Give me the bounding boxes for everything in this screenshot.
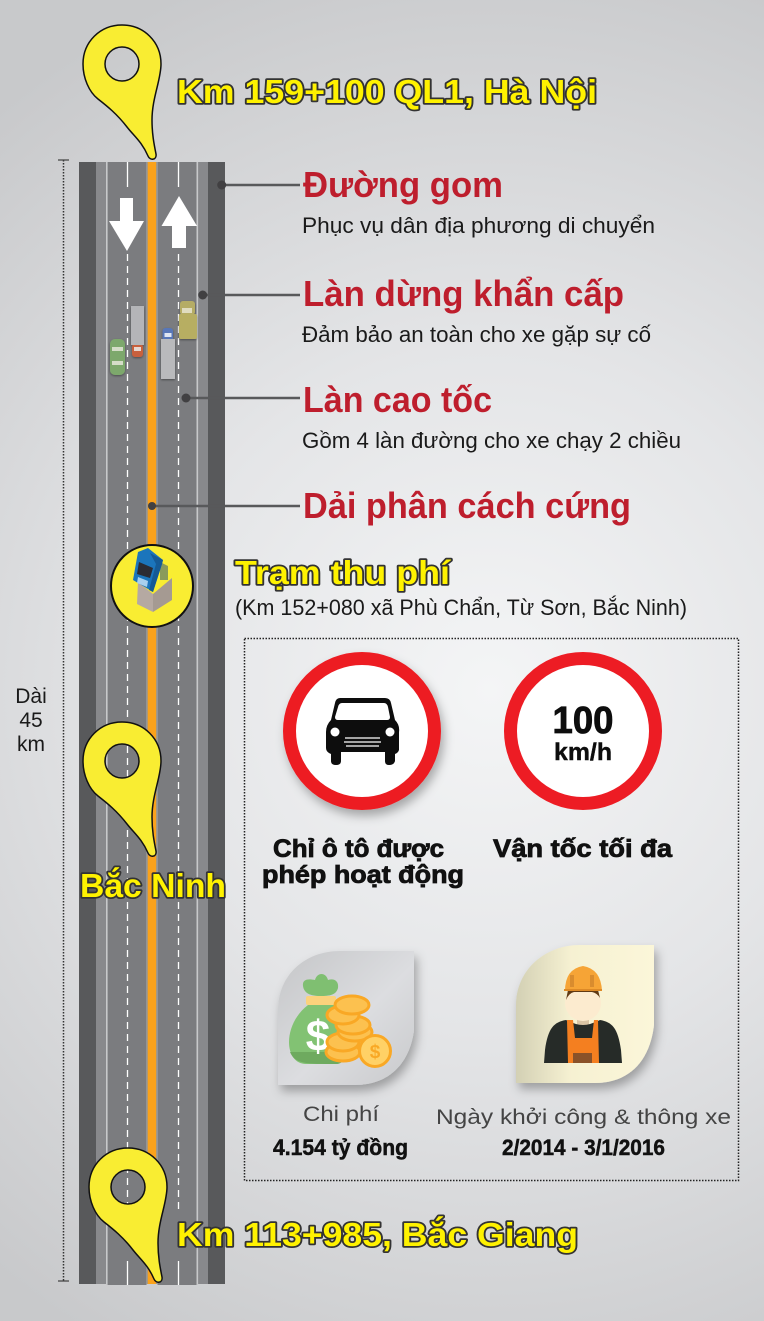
icon: construction worker (516, 945, 654, 1083)
fact: construction dates (436, 1106, 731, 1160)
callout: median (148, 485, 631, 526)
fact: construction dates: 2/2014 - 3/1/2016 (502, 1135, 665, 1160)
label: cars only (262, 835, 464, 889)
sign: cars only (290, 658, 434, 804)
sign: speed limit (510, 658, 656, 804)
length dimension line (58, 160, 69, 1281)
icon: toll booth (111, 545, 193, 627)
label: cars only: phép hoạt động (262, 861, 464, 889)
label: speed limit: Vận tốc tối đa (493, 835, 673, 863)
callout: expressway lanes (182, 379, 681, 453)
panel: regulations and facts (244, 638, 738, 1180)
label: cars only: Chỉ ô tô được (273, 835, 444, 863)
icon: money bag and coins: $ (370, 1042, 381, 1063)
fact: cost (273, 1103, 408, 1160)
icon: money bag and coins: $ (306, 1012, 330, 1061)
callout: emergency lane: Đảm bảo an toàn cho xe gặp sự cố (302, 322, 651, 347)
icon: money bag and coins (278, 951, 414, 1085)
callout: emergency lane (198, 273, 651, 347)
vehicles (110, 301, 197, 379)
icon: direction arrow down (109, 198, 144, 251)
toll station label: (Km 152+080 xã Phù Chẩn, Từ Sơn, Bắc Ninh) (235, 595, 687, 620)
label: end location: Km 113+985, Bắc Giang (177, 1216, 578, 1253)
callout: service road: Đường gom (303, 164, 503, 205)
pin: Bắc Ninh (83, 722, 161, 856)
icon: direction arrow up (162, 196, 197, 248)
callout: expressway lanes: Gồm 4 làn đường cho xe chạy 2 chiều (302, 428, 681, 453)
length label: 45 (19, 709, 43, 732)
fact: cost: Chi phí (303, 1103, 379, 1126)
fact: cost: 4.154 tỷ đồng (273, 1135, 408, 1160)
callout: emergency lane: Làn dừng khẩn cấp (303, 273, 624, 314)
sign: speed limit: 100 (552, 700, 614, 742)
fact: construction dates: Ngày khởi công & thông xe (436, 1106, 731, 1129)
callout: expressway lanes: Làn cao tốc (303, 379, 492, 420)
label: Bắc Ninh: Bắc Ninh (80, 867, 226, 904)
length label: km (17, 733, 45, 756)
callout: service road: Phục vụ dân địa phương di chuyển (302, 213, 655, 238)
pin: bottom (89, 1148, 167, 1282)
toll station label: Trạm thu phí (235, 554, 452, 591)
road (79, 162, 225, 1285)
label: start location: Km 159+100 QL1, Hà Nội (177, 73, 597, 110)
sign: speed limit: km/h (554, 739, 612, 766)
pin: top (83, 25, 161, 159)
callout: median: Dải phân cách cứng (303, 485, 631, 526)
length label: Dài (15, 685, 47, 708)
toll station label (235, 554, 687, 620)
length label (15, 685, 47, 756)
callout: service road (217, 164, 655, 238)
